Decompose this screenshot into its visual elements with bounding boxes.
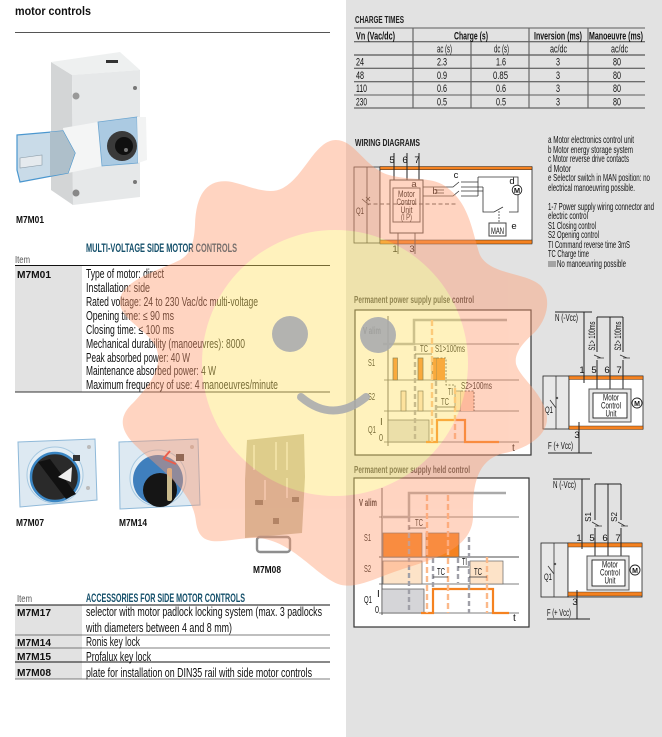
wiring diagram: held control: 6 — [602, 533, 608, 544]
chart: held control timing: I — [377, 589, 380, 600]
table: charge times: 24 — [356, 56, 364, 68]
wiring diagram: (I P) — [401, 212, 412, 223]
label: M7M14: M7M14 — [119, 518, 147, 529]
wiring diagram: held control — [541, 479, 642, 619]
wiring diagram: pulse control: S2> 100ms — [613, 321, 624, 350]
legend: wiring diagram key — [548, 135, 654, 270]
table: charge times: 0.9 — [437, 70, 447, 82]
table: M7M01 specifications — [15, 266, 330, 392]
table: accessories: M7M14 — [17, 638, 51, 649]
table: M7M01 specifications: Maintenance absorbed power: 4 W — [86, 364, 216, 378]
table: accessories: M7M17 — [17, 608, 51, 619]
table: charge times: 110 — [356, 83, 367, 95]
table: charge times: ac/dc — [550, 44, 567, 56]
chart: pulse control timing: V alim — [363, 326, 381, 337]
table: M7M01 specifications: Rated voltage: 24 to 230 Vac/dc multi-voltage — [86, 295, 258, 309]
label: M7M08: M7M08 — [253, 565, 281, 576]
chart: held control timing: TC — [437, 567, 445, 578]
table: charge times: 80 — [613, 83, 621, 95]
label: M7M01: M7M01 — [16, 215, 44, 226]
table: charge times: 80 — [613, 96, 621, 108]
wiring diagram: 7 — [414, 155, 420, 166]
wiring diagram: held control: Q1 — [544, 572, 552, 583]
heading: charge times: CHARGE TIMES — [355, 15, 404, 26]
wiring diagram: e — [511, 221, 517, 232]
wiring diagram: pulse control — [543, 312, 643, 453]
chart: pulse control timing: S1 — [368, 358, 375, 369]
chart: held control timing: t — [513, 613, 516, 624]
table: charge times: 3 — [556, 83, 560, 95]
wiring diagram: pulse control: 6 — [604, 365, 610, 376]
column label: item (accessories): Item — [17, 594, 32, 605]
wiring diagram: held control: M — [632, 568, 638, 575]
table: charge times: ac (s) — [437, 44, 452, 56]
wiring diagram — [354, 153, 532, 255]
table: charge times: 80 — [613, 70, 621, 82]
wiring diagram: pulse control: 3 — [574, 430, 580, 441]
wiring diagram: c — [454, 170, 459, 181]
heading: pulse control: Permanent power supply pulse control — [354, 295, 474, 306]
wiring diagram: pulse control: 1 — [579, 365, 585, 376]
chart: held control timing: TC — [474, 567, 482, 578]
wiring diagram: pulse control: 5 — [591, 365, 597, 376]
table: charge times: 2.3 — [437, 56, 447, 68]
table: M7M01 specifications: Closing time: ≤ 100 ms — [86, 323, 174, 337]
table: M7M01 specifications: Mechanical durability (manoeuvres): 8000 — [86, 337, 245, 351]
wiring diagram: held control: F (+ Vcc) — [547, 608, 571, 619]
heading: accessories: ACCESSORIES FOR SIDE MOTOR CONTROLS — [86, 593, 245, 605]
wiring diagram: held control: 3 — [572, 597, 578, 608]
chart: pulse control timing: S2>100ms — [461, 381, 492, 392]
chart: pulse control timing: S2 — [368, 392, 375, 403]
wiring diagram: held control: Unit — [604, 576, 616, 586]
chart: held control timing — [354, 478, 529, 627]
photo: M7M08 mounting plate — [245, 434, 305, 552]
heading: held control: Permanent power supply held control — [354, 465, 470, 476]
table: charge times: 48 — [356, 70, 364, 82]
chart: held control timing: V alim — [359, 498, 377, 509]
legend: wiring diagram key: S1 Closing control — [548, 221, 596, 232]
chart: held control timing: S1 — [364, 533, 371, 544]
wiring diagram: pulse control: S1> 100ms — [587, 321, 598, 350]
table: charge times: 0.6 — [437, 83, 447, 95]
chart: pulse control timing: TI — [448, 387, 453, 398]
title: motor controls — [15, 4, 91, 18]
wiring diagram: 3 — [409, 244, 415, 255]
wiring diagram: Unit — [400, 205, 413, 216]
wiring diagram: pulse control: Q1 — [545, 405, 553, 416]
table: charge times: 3 — [556, 56, 560, 68]
table: charge times: Charge (s) — [454, 30, 488, 42]
chart: held control timing: 0 — [375, 605, 379, 616]
chart: pulse control timing: I — [380, 417, 383, 428]
table: M7M01 specifications: Opening time: ≤ 90 ms — [86, 309, 174, 323]
chart: pulse control timing — [355, 310, 531, 455]
table: charge times: ac/dc — [611, 44, 628, 56]
wiring diagram: held control: 7 — [615, 533, 621, 544]
wiring diagram: pulse control: M — [634, 401, 640, 408]
table: accessories: selector with motor padlock locking system (max. 3 padlocks — [86, 605, 322, 619]
wiring diagram: 5 — [389, 155, 395, 166]
table: accessories: Ronis key lock — [86, 635, 140, 649]
chart: pulse control timing: 0 — [379, 433, 383, 444]
table: accessories: M7M15 — [17, 652, 51, 663]
wiring diagram: M — [514, 186, 520, 195]
wiring diagram: pulse control: Control — [601, 400, 621, 412]
photo: M7M14 key lock — [119, 439, 200, 509]
wiring diagram: Motor — [398, 189, 415, 200]
wiring diagram: pulse control: Unit — [606, 408, 617, 420]
chart: held control timing: Q1 — [364, 595, 372, 606]
table: accessories: Profalux key lock — [86, 650, 152, 664]
table: M7M01 specifications: Maximum frequency of use: 4 manoeuvres/minute — [86, 378, 278, 392]
wiring diagram: d — [509, 176, 515, 187]
chart: held control timing: TC — [415, 518, 423, 529]
chart: pulse control timing: t — [512, 443, 515, 454]
table: charge times: 0.85 — [493, 70, 508, 82]
table: accessories: plate for installation on DIN35 rail with side motor controls — [86, 666, 312, 680]
chart: pulse control timing: TC — [441, 397, 449, 408]
legend: wiring diagram key: electric control — [548, 211, 588, 222]
legend: wiring diagram key: S2 Opening control — [548, 230, 599, 241]
wiring diagram: Control — [396, 197, 416, 208]
chart: pulse control timing: Q1 — [368, 425, 376, 436]
wiring diagram: held control: 1 — [576, 533, 582, 544]
table: accessories: with diameters between 4 and 8 mm) — [85, 621, 232, 635]
wiring diagram: MAN — [491, 226, 504, 237]
chart: pulse control timing: TC — [420, 344, 428, 355]
watermark: smiling flower overlay — [120, 140, 547, 586]
table: accessories — [15, 605, 330, 680]
table: charge times: 0.6 — [496, 83, 506, 95]
wiring diagram: held control: Motor — [602, 560, 618, 570]
wiring diagram: held control: S1 — [584, 512, 593, 522]
chart: pulse control timing: S1>100ms — [435, 344, 465, 355]
table: M7M01 specifications: Installation: side — [86, 281, 150, 295]
wiring diagram: pulse control: Motor — [603, 392, 619, 404]
chart: held control timing: S2 — [364, 564, 371, 575]
wiring diagram: pulse control: N (-Vcc) — [555, 313, 578, 324]
panel: right grey column — [346, 0, 662, 737]
legend: wiring diagram key: TC Charge time — [548, 249, 589, 260]
wiring diagram: held control: Control — [600, 568, 620, 578]
table: charge times: dc (s) — [494, 44, 509, 56]
heading: multi-voltage side motor controls: MULTI-VOLTAGE SIDE MOTOR CONTROLS — [86, 243, 237, 255]
wiring diagram: 6 — [402, 155, 408, 166]
table: charge times — [354, 28, 645, 108]
wiring diagram: Q1 — [356, 206, 364, 217]
chart: held control timing: TI — [462, 557, 467, 568]
wiring diagram: a — [411, 179, 417, 190]
legend: wiring diagram key: d Motor — [548, 164, 571, 175]
table: charge times: 1.6 — [496, 56, 506, 68]
wiring diagram: b — [432, 186, 438, 197]
photo: M7M07 selector — [18, 439, 97, 507]
table: charge times: 0.5 — [437, 96, 447, 108]
wiring diagram: pulse control: 7 — [616, 365, 622, 376]
table: charge times: Inversion (ms) — [534, 30, 582, 42]
table: charge times: 80 — [613, 56, 621, 68]
table: charge times: 3 — [556, 96, 560, 108]
wiring diagram: held control: N (-Vcc) — [553, 480, 576, 491]
label: M7M07: M7M07 — [16, 518, 44, 529]
heading: wiring diagrams: WIRING DIAGRAMS — [355, 138, 420, 149]
photo: M7M01 side motor control — [17, 52, 147, 205]
table: charge times: 230 — [356, 96, 367, 108]
table: M7M01 specifications: Peak absorbed power: 40 W — [86, 351, 190, 365]
table: charge times: Vn (Vac/dc) — [356, 30, 395, 42]
wiring diagram: pulse control: F (+ Vcc) — [548, 441, 573, 452]
wiring diagram: held control: 5 — [589, 533, 595, 544]
table: charge times: 0.5 — [496, 96, 506, 108]
wiring diagram: 1 — [392, 244, 398, 255]
table: M7M01 specifications: M7M01 — [17, 270, 51, 281]
table: accessories: M7M08 — [17, 668, 51, 679]
wiring diagram: held control: S2 — [610, 512, 619, 522]
table: charge times: 3 — [556, 70, 560, 82]
table: M7M01 specifications: Type of motor: direct — [86, 267, 164, 281]
column label: item: Item — [15, 255, 30, 266]
